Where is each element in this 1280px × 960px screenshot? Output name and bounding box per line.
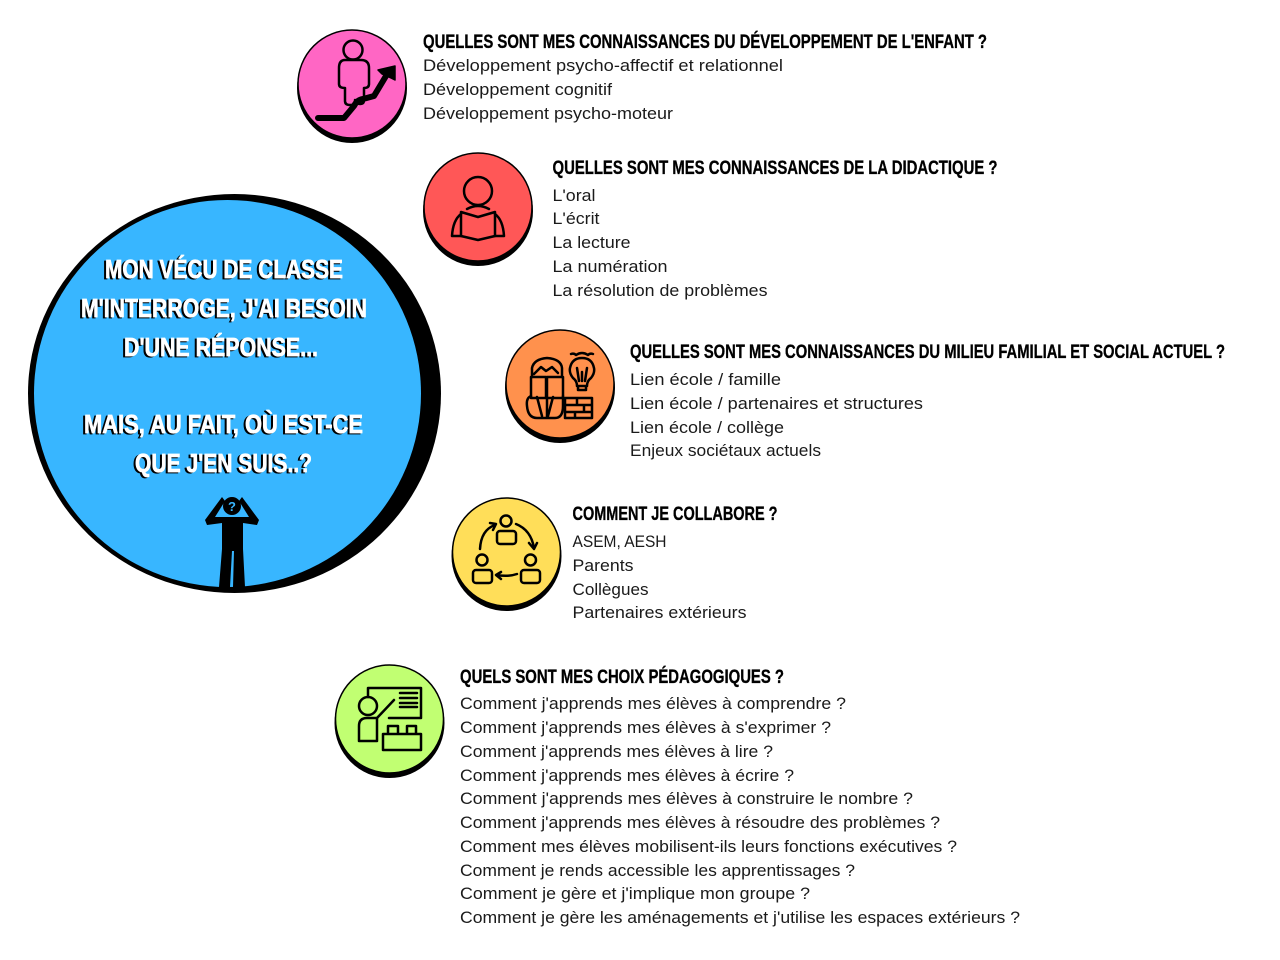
list xyxy=(630,371,923,460)
list: Comment j'apprends mes élèves à comprendre ? xyxy=(460,695,846,713)
central text: MON VÉCU DE CLASSE xyxy=(105,254,343,284)
central text: D'UNE RÉPONSE... xyxy=(124,332,318,362)
list: Partenaires extérieurs xyxy=(572,604,746,622)
list: Développement psycho-affectif et relationnel xyxy=(423,57,783,75)
panel: family and social environment xyxy=(505,330,1225,460)
icon: puzzled person xyxy=(205,497,259,587)
list: Comment je gère et j'implique mon groupe ? xyxy=(460,885,810,903)
list: Comment j'apprends mes élèves à lire ? xyxy=(460,743,773,761)
panel: pedagogical choices xyxy=(334,665,1020,927)
list xyxy=(460,695,1020,927)
icon: red circle with reader xyxy=(423,153,533,266)
list: Lien école / partenaires et structures xyxy=(630,395,923,413)
list: Comment j'apprends mes élèves à écrire ? xyxy=(460,767,794,785)
panel: didactics xyxy=(423,153,998,300)
list: ASEM, AESH xyxy=(572,533,666,551)
central circle shadow xyxy=(28,194,441,593)
icon: puzzled person: ? xyxy=(228,499,236,514)
icon: orange circle with student, bulb and bricks xyxy=(505,330,615,443)
list: Développement psycho-moteur xyxy=(423,105,674,123)
list: Comment j'apprends mes élèves à s'exprimer ? xyxy=(460,719,831,737)
list: Collègues xyxy=(572,581,648,599)
list: La lecture xyxy=(552,234,630,252)
heading: QUELLES SONT MES CONNAISSANCES DE LA DIDACTIQUE ? xyxy=(552,157,998,179)
list: L'oral xyxy=(552,187,596,205)
list: Enjeux sociétaux actuels xyxy=(630,442,821,460)
icon: green circle with teacher at board xyxy=(334,665,444,778)
heading: COMMENT JE COLLABORE ? xyxy=(572,503,778,525)
central text xyxy=(81,254,367,478)
heading: QUELS SONT MES CHOIX PÉDAGOGIQUES ? xyxy=(460,665,784,688)
list: La résolution de problèmes xyxy=(552,282,768,300)
panel: collaboration xyxy=(452,498,778,622)
central text: MAIS, AU FAIT, OÙ EST-CE xyxy=(84,409,363,439)
panel: child development xyxy=(297,30,987,143)
list: Lien école / collège xyxy=(630,419,784,437)
central text: M'INTERROGE, J'AI BESOIN xyxy=(81,293,367,323)
list: Comment j'apprends mes élèves à construire le nombre ? xyxy=(460,790,913,808)
list: La numération xyxy=(552,258,668,276)
list: Développement cognitif xyxy=(423,81,612,99)
central blue circle xyxy=(34,200,421,587)
panel: central question circle xyxy=(28,194,441,593)
icon: pink circle with person and rising arrow xyxy=(297,30,407,143)
list: Parents xyxy=(572,557,634,575)
list: Lien école / famille xyxy=(630,371,781,389)
list: Comment je gère les aménagements et j'utilise les espaces extérieurs ? xyxy=(460,909,1020,927)
list: Comment je rends accessible les apprentissages ? xyxy=(460,862,855,880)
list: L'écrit xyxy=(552,210,600,228)
list: Comment mes élèves mobilisent-ils leurs fonctions exécutives ? xyxy=(460,838,957,856)
list: Comment j'apprends mes élèves à résoudre des problèmes ? xyxy=(460,814,940,832)
list xyxy=(423,57,783,123)
central text: QUE J'EN SUIS..? xyxy=(135,448,312,478)
icon: yellow circle with three people and arrows xyxy=(452,498,562,611)
list xyxy=(552,187,768,300)
heading: QUELLES SONT MES CONNAISSANCES DU DÉVELOPPEMENT DE L'ENFANT ? xyxy=(423,30,987,53)
list xyxy=(572,533,746,622)
